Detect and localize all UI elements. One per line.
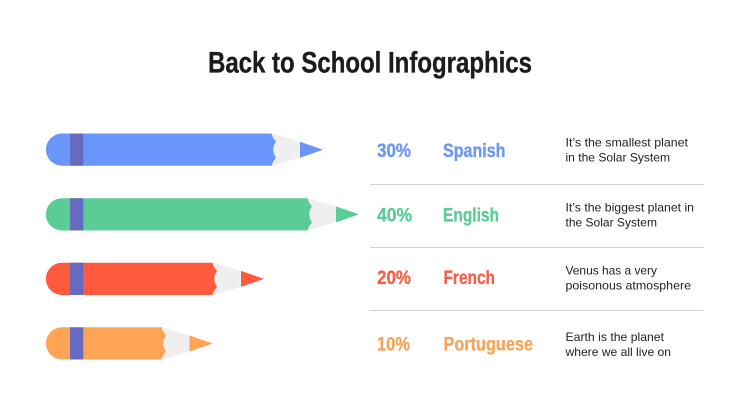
percentage: 30%: 30%: [377, 141, 411, 162]
percentage: 20%: 20%: [377, 268, 411, 289]
row: Portuguese: [377, 330, 671, 359]
title: Back to School Infographics: [208, 46, 532, 80]
label: English: English: [443, 205, 499, 227]
label: French: French: [444, 267, 495, 289]
description: Spanish: in the Solar System: [566, 151, 670, 165]
description: French: poisonous atmosphere: [566, 278, 691, 292]
percentage: 40%: 40%: [377, 206, 412, 227]
pencil: English 40%: [46, 198, 359, 230]
label: Portuguese: Portuguese: [444, 334, 533, 356]
description: Spanish: It’s the smallest planet: [566, 136, 689, 150]
pencil: French 20%: [46, 263, 264, 295]
pencil: Portuguese 10%: [46, 327, 213, 360]
row: English: [377, 201, 694, 230]
label: Spanish: Spanish: [443, 140, 506, 162]
row: French: [377, 263, 691, 292]
description: French: Venus has a very: [566, 263, 657, 277]
description: English: It’s the biggest planet in: [566, 201, 694, 215]
description: Portuguese: Earth is the planet: [566, 330, 665, 344]
pencil: Spanish 30%: [46, 134, 323, 166]
percentage: 10%: 10%: [377, 335, 410, 356]
row: Spanish: [377, 136, 689, 165]
description: Portuguese: where we all live on: [564, 345, 671, 359]
description: English: the Solar System: [566, 216, 657, 230]
